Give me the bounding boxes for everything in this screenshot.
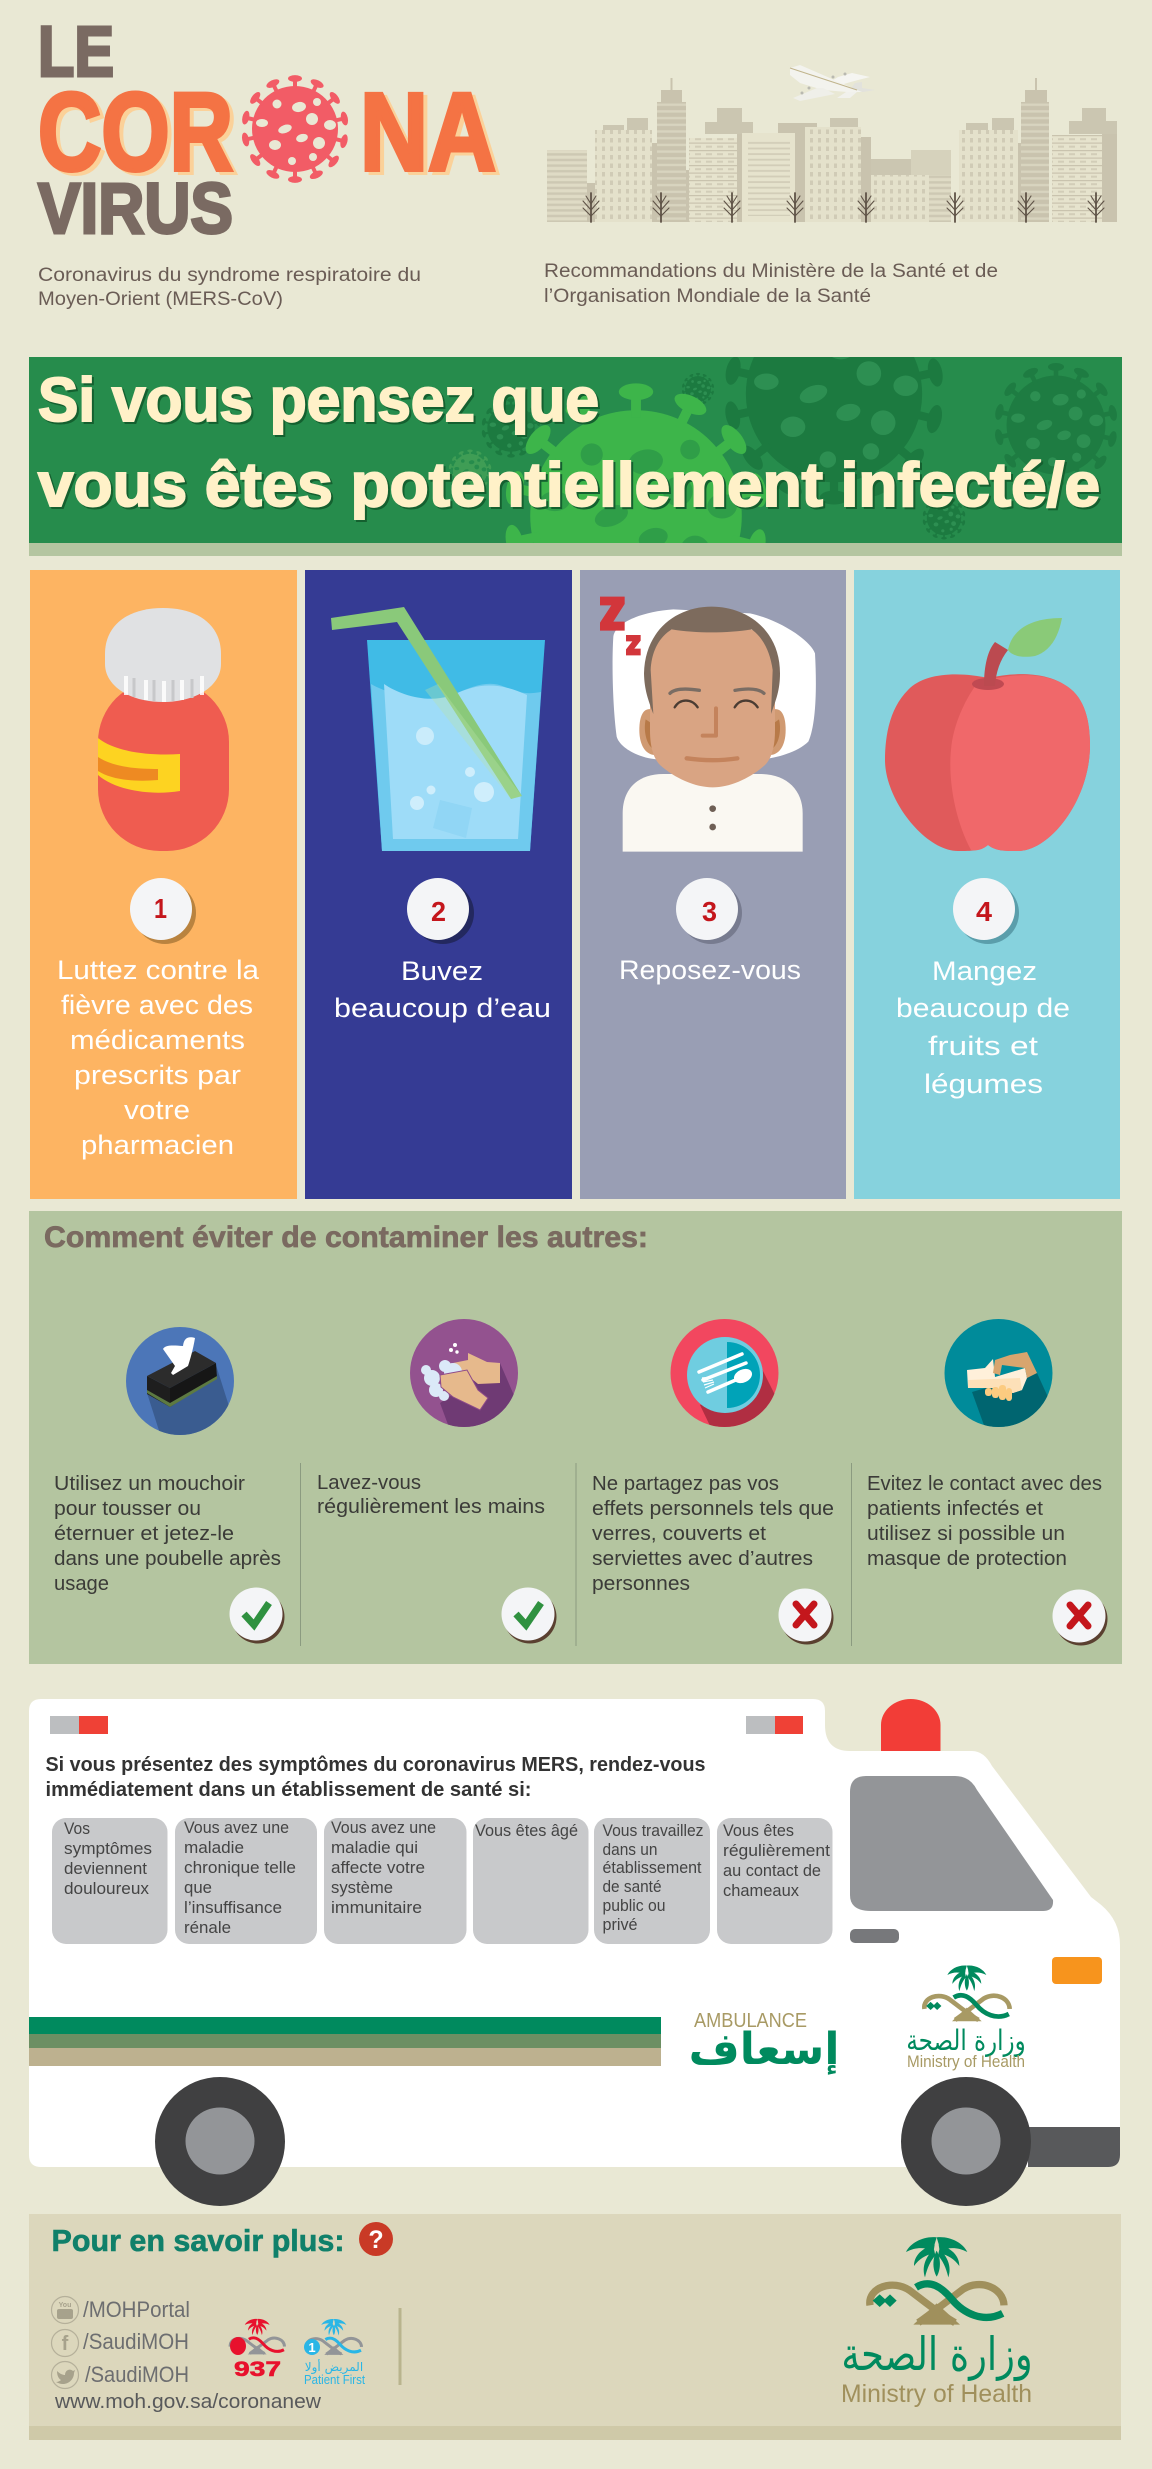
box: health worker: Vous travaillez — [602, 1822, 704, 1840]
text: tissue advice: dans une poubelle après — [54, 1548, 281, 1570]
text: do not share: Ne partagez pas vos — [592, 1473, 779, 1495]
box: chronic disease — [175, 1818, 317, 1944]
panel: card 4 fruit — [854, 570, 1120, 1199]
text: tissue advice: usage — [54, 1573, 109, 1595]
logo: ministry of health: وزارة الصحة — [841, 2327, 1033, 2381]
badge: number 3: 3 — [702, 896, 717, 927]
box: symptoms: deviennent — [64, 1860, 147, 1878]
text: do not share — [592, 1473, 834, 1595]
text: card 4: Mangez — [932, 956, 1037, 986]
heading: symptoms: immédiatement dans un établissement de santé si: — [46, 1779, 532, 1801]
ambulance label: AMBULANCE — [694, 2010, 807, 2032]
text: card 4: fruits et — [928, 1031, 1039, 1061]
text: card 4 — [896, 956, 1070, 1099]
text: avoid contact: Evitez le contact avec des — [867, 1473, 1102, 1495]
side stripes — [29, 2017, 661, 2066]
subtitle left: Moyen-Orient (MERS-CoV) — [38, 289, 283, 310]
website: www.moh.gov.sa/coronanew — [54, 2391, 322, 2413]
heading: pour en savoir plus: Pour en savoir plus: — [52, 2223, 344, 2258]
box: immune disease — [324, 1818, 466, 1944]
box: chronic disease: que — [184, 1879, 212, 1897]
box: health worker: établissement — [602, 1859, 702, 1877]
panel: card 3 rest — [580, 570, 846, 1199]
box: chronic disease: rénale — [184, 1919, 231, 1937]
icon: airplane — [790, 65, 875, 101]
text: card 2: beaucoup d’eau — [334, 993, 551, 1023]
icon: coronavirus in title — [241, 75, 349, 183]
icon: question mark: ? — [368, 2226, 384, 2254]
panel: card 1 medicine — [30, 570, 297, 1199]
heading: symptoms: Si vous présentez des symptômes du coronavirus MERS, rendez-vous — [46, 1754, 706, 1776]
badge: number 2 — [407, 878, 474, 944]
text: avoid contact: masque de protection — [867, 1548, 1067, 1570]
text: card 1: prescrits par — [74, 1060, 241, 1090]
dividers — [300, 1463, 852, 1646]
icon: tissue box — [126, 1327, 240, 1440]
social links: /SaudiMOH — [85, 2362, 189, 2387]
banner: si vous pensez: vous êtes potentiellement infecté/e — [38, 451, 1100, 520]
icon: sleeping man — [600, 597, 816, 852]
social links: /SaudiMOH — [83, 2329, 189, 2354]
title: Le Corona Virus: NA — [360, 71, 496, 194]
icon: apple — [885, 618, 1090, 851]
panel: avoid contaminating others — [29, 1211, 1122, 1664]
text: tissue advice — [54, 1473, 281, 1595]
icon: glass of water — [331, 607, 545, 851]
text: card 1 — [57, 955, 260, 1160]
box: symptoms: symptômes — [64, 1840, 152, 1858]
box: immune disease: immunitaire — [331, 1899, 422, 1917]
social links: You — [59, 2302, 71, 2309]
logo: ministry of health on ambulance: Ministry of Health — [907, 2052, 1025, 2071]
box: chronic disease: chronique telle — [184, 1859, 296, 1877]
logo: 937: 937 — [234, 2358, 281, 2381]
badge: number 1 — [130, 878, 196, 944]
box: health worker: dans un — [602, 1841, 658, 1859]
door handle — [850, 1929, 899, 1943]
icon: red siren — [881, 1699, 940, 1755]
logo: patient first — [304, 2319, 365, 2387]
box: symptoms: douloureux — [64, 1880, 150, 1898]
box: immune disease: affecte votre — [331, 1859, 425, 1877]
box: chronic disease: Vous avez une — [184, 1819, 289, 1837]
icon: check badge 1 — [230, 1588, 284, 1644]
text: do not share: effets personnels tels que — [592, 1498, 834, 1520]
subtitle left: Coronavirus du syndrome respiratoire du — [38, 265, 421, 286]
text: card 1: votre — [124, 1095, 190, 1125]
box: camels: au contact de — [723, 1862, 821, 1880]
ambulance body — [29, 1699, 1120, 2167]
text: do not share: personnes — [592, 1573, 690, 1595]
logo: ministry of health — [841, 2237, 1033, 2408]
icon: medicine bottle — [98, 608, 229, 851]
social links: f — [62, 2333, 69, 2355]
text: avoid contact: utilisez si possible un — [867, 1523, 1065, 1545]
social links — [52, 2296, 190, 2388]
badge: number 2: 2 — [431, 896, 446, 927]
box: immune disease: système — [331, 1879, 393, 1897]
text: wash hands — [317, 1472, 545, 1518]
text: tissue advice: Utilisez un mouchoir — [54, 1473, 245, 1495]
text: wash hands: régulièrement les mains — [317, 1496, 545, 1518]
box: camels: chameaux — [723, 1882, 800, 1900]
logo: ministry of health on ambulance: وزارة الصحة — [906, 2025, 1026, 2058]
icon: washing hands — [410, 1319, 518, 1427]
social links: /MOHPortal — [83, 2297, 190, 2322]
text: card 4: légumes — [924, 1069, 1043, 1099]
panel: ambulance — [29, 1699, 1120, 2206]
badge: number 4: 4 — [976, 896, 992, 927]
badge: number 4 — [953, 878, 1019, 944]
box: health worker: de santé — [602, 1878, 662, 1896]
logo: ministry of health on ambulance — [906, 1966, 1026, 2071]
logo: ministry of health: Ministry of Health — [841, 2380, 1032, 2408]
text: do not share: serviettes avec d’autres — [592, 1548, 813, 1570]
panel: footer — [29, 2214, 1121, 2440]
virus decoration — [449, 357, 1117, 543]
icon: handshake — [944, 1319, 1060, 1428]
roof flags — [50, 1716, 803, 1734]
panel: card 2 water — [305, 570, 572, 1199]
box: camels — [717, 1818, 832, 1944]
logo: patient first: Patient First — [304, 2372, 365, 2387]
bumper — [1028, 2127, 1120, 2167]
text: card 1: Luttez contre la — [57, 955, 260, 985]
banner: si vous pensez: Si vous pensez que — [38, 366, 599, 435]
subtitle right: Recommandations du Ministère de la Santé et de — [544, 261, 998, 282]
text: wash hands: Lavez-vous — [317, 1472, 421, 1494]
icon: cross badge 4 — [1052, 1590, 1108, 1646]
badge: number 3 — [676, 878, 742, 944]
subtitle right: l’Organisation Mondiale de la Santé — [544, 286, 871, 307]
box: chronic disease: maladie — [184, 1839, 244, 1857]
box: age: Vous êtes âgé — [475, 1822, 578, 1840]
wheel left — [155, 2077, 285, 2206]
text: card 2 — [334, 956, 551, 1023]
box: camels: Vous êtes — [723, 1822, 794, 1840]
banner: si vous pensez — [29, 357, 1122, 556]
text: card 4: beaucoup de — [896, 993, 1070, 1023]
text: do not share: verres, couverts et — [592, 1523, 766, 1545]
box: symptoms — [52, 1818, 168, 1944]
text: card 1: médicaments — [70, 1025, 245, 1055]
box: camels: régulièrement — [723, 1842, 830, 1860]
logo: 937 — [230, 2319, 284, 2381]
title: Le Corona Virus — [38, 13, 496, 249]
icon: plate and cutlery — [670, 1319, 778, 1427]
text: tissue advice: éternuer et jetez-le — [54, 1523, 234, 1545]
title: Le Corona Virus: LE — [38, 13, 114, 92]
text: card 3: Reposez-vous — [619, 955, 801, 985]
subtitle right — [544, 261, 998, 307]
badge: number 1: 1 — [154, 893, 167, 924]
text: card 1: pharmacien — [81, 1130, 234, 1160]
box: health worker: public ou — [602, 1897, 666, 1915]
icon: check badge 2 — [502, 1588, 556, 1644]
subtitle left — [38, 265, 421, 310]
orange light — [1052, 1957, 1102, 1984]
title: Le Corona Virus: VIRUS — [38, 170, 233, 249]
title: Le Corona Virus: COR — [38, 71, 233, 194]
box: age — [473, 1818, 588, 1944]
box: health worker: privé — [602, 1916, 638, 1934]
text: tissue advice: pour tousser ou — [54, 1498, 201, 1520]
heading: Comment éviter de contaminer les autres: — [44, 1221, 648, 1254]
box: symptoms: Vos — [64, 1820, 90, 1838]
text: avoid contact: patients infectés et — [867, 1498, 1043, 1520]
text: avoid contact — [867, 1473, 1102, 1570]
illustration: city skyline — [547, 78, 1117, 222]
box: chronic disease: l’insuffisance — [184, 1899, 282, 1917]
text: card 2: Buvez — [401, 956, 483, 986]
box: immune disease: maladie qui — [331, 1839, 418, 1857]
box: health worker — [594, 1818, 710, 1944]
wheel right — [901, 2077, 1031, 2206]
heading: symptoms — [46, 1754, 706, 1801]
divider — [398, 2308, 402, 2385]
ambulance window — [850, 1776, 1053, 1911]
box: immune disease: Vous avez une — [331, 1819, 436, 1837]
ambulance label: إسعاف — [689, 2024, 839, 2075]
logo: patient first: 1 — [308, 2340, 316, 2355]
logo: patient first: المريض أولا — [305, 2359, 363, 2375]
text: card 1: fièvre avec des — [61, 990, 253, 1020]
icon: question mark — [359, 2222, 393, 2256]
icon: cross badge 3 — [778, 1588, 834, 1644]
